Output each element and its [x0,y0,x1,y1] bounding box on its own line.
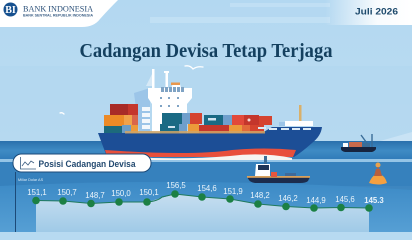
chart heading: Posisi Cadangan Devisa [38,159,136,170]
masts [146,69,169,89]
data labels: 144,9 [306,196,326,205]
date: Juli 2026 [355,6,398,18]
trend line [36,194,369,208]
unit label: Miliar Dolar AS [18,178,44,182]
tug boat [247,156,310,183]
icon: BI emblem: BI [5,5,16,16]
data points [32,190,373,212]
rear containers [104,104,138,134]
chart header pill [13,154,151,172]
chart axis [15,172,16,232]
data labels: 148,7 [85,191,105,200]
side decks [142,107,150,129]
data labels: 150,7 [57,188,77,197]
bow foam [108,154,292,160]
sea [0,132,412,232]
ship rear superstructure shade [134,88,150,132]
chart area fill [36,194,369,232]
data labels [27,181,384,205]
title: Cadangan Devisa Tetap Terjaga [80,40,332,62]
line chart [15,172,384,232]
data labels: 145.3 [364,196,384,205]
mid containers [160,113,272,133]
data labels: 150,0 [111,189,131,198]
data labels: 146,2 [278,194,298,203]
icon: line chart [20,157,36,169]
top-right white banner [325,0,412,25]
logo subtitle: BANK SENTRAL REPUBLIK INDONESIA [23,14,94,18]
hull windows [258,127,311,130]
data labels: 145,6 [335,195,355,204]
sky background [0,0,412,142]
logo wordmark: BANK INDONESIA [23,4,94,14]
data labels: 151,1 [27,188,47,197]
data labels: 151,9 [223,187,243,196]
logo panel [0,0,118,27]
data labels: 154,6 [197,184,217,193]
Bank Indonesia logo [4,2,94,18]
forward crane [299,105,302,126]
hull [98,127,322,157]
bridge windows [160,87,184,107]
cargo ship [98,69,322,160]
icon: seagulls [60,66,203,114]
buoy [369,162,387,184]
data labels: 148,2 [250,191,270,200]
data labels: 156,5 [166,181,186,190]
data labels: 150,1 [139,188,159,197]
superstructure [148,84,192,132]
small cargo vessel [341,134,376,152]
red waterline [105,148,296,157]
deck railing [125,131,265,134]
